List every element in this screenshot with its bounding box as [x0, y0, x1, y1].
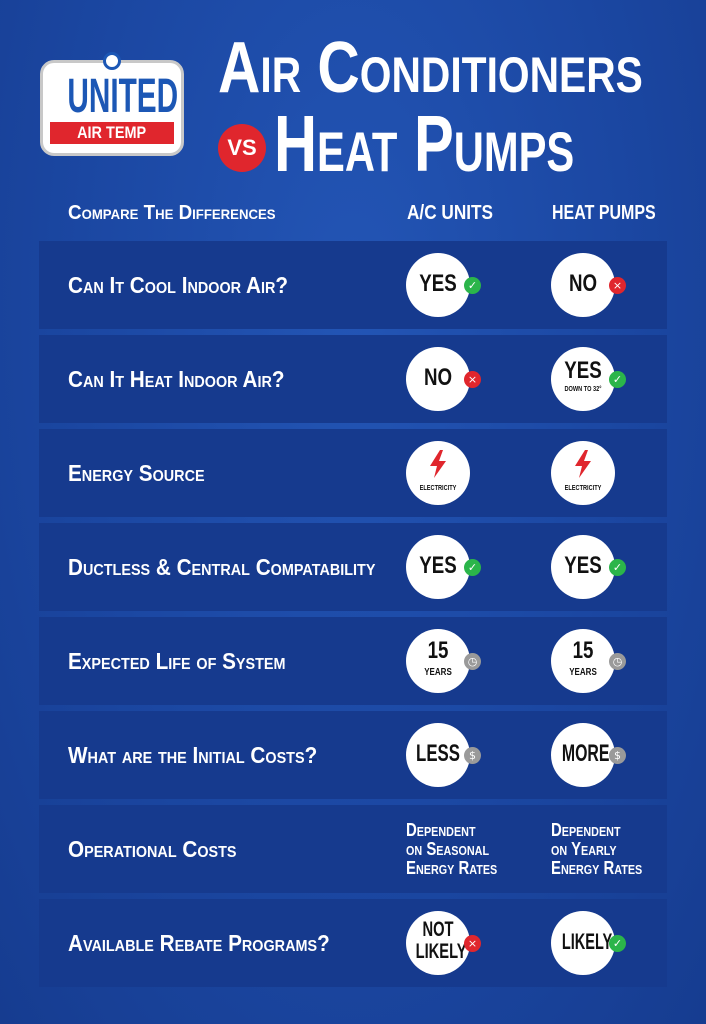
row: operational: on Seasonal	[406, 839, 489, 859]
icon: logo mark	[103, 52, 121, 70]
row: heat: YES	[564, 357, 602, 384]
row: cool: YES	[419, 270, 457, 297]
row: operational: Dependent	[551, 820, 621, 840]
text: HEAT PUMPS	[552, 202, 656, 224]
vs badge: VS	[227, 135, 257, 160]
row: life: ◷	[468, 655, 477, 668]
column headers: Compare The Differences	[68, 202, 276, 224]
text: A/C UNITS	[407, 202, 493, 224]
title: Air Conditioners	[218, 28, 643, 108]
row: operational: Energy Rates	[551, 858, 642, 878]
row: initial	[39, 711, 667, 799]
row: rebate: ×	[468, 937, 477, 950]
row: life: 15	[573, 637, 593, 664]
logo	[40, 52, 184, 156]
row: life	[39, 617, 667, 705]
row: life: 15	[428, 637, 448, 664]
row: rebate: LIKELY	[416, 940, 467, 963]
row: operational: on Yearly	[551, 839, 617, 859]
row: heat: DOWN TO 32°	[564, 386, 601, 393]
row: energy: ELECTRICITY	[565, 485, 601, 492]
row: cool: NO	[569, 270, 597, 297]
row: energy: ELECTRICITY	[420, 485, 456, 492]
row: energy: Energy Source	[68, 460, 205, 486]
row: heat: ×	[468, 373, 477, 386]
row: heat: ✓	[613, 373, 622, 386]
vs badge	[218, 124, 266, 172]
row: operational: Energy Rates	[406, 858, 497, 878]
row: heat	[39, 335, 667, 423]
row: operational: Operational Costs	[68, 836, 237, 862]
row: operational: Dependent	[406, 820, 476, 840]
row: operational	[39, 805, 667, 893]
row: initial: What are the Initial Costs?	[68, 742, 317, 768]
row: ductless: Ductless & Central Compatability	[68, 554, 375, 580]
logo: UNITED	[67, 70, 178, 123]
row: ductless	[39, 523, 667, 611]
row: rebate: ✓	[613, 937, 622, 950]
row: life: YEARS	[424, 667, 452, 678]
row: cool: ✓	[468, 279, 477, 292]
row: heat: NO	[424, 364, 452, 391]
row: ductless: YES	[419, 552, 457, 579]
logo: AIR TEMP	[77, 123, 147, 142]
row: life: YEARS	[569, 667, 597, 678]
row: heat: Can It Heat Indoor Air?	[68, 366, 285, 392]
row: ductless: ✓	[468, 561, 477, 574]
row: rebate: Available Rebate Programs?	[68, 930, 330, 956]
row: rebate: LIKELY	[562, 929, 612, 954]
row: ductless: ✓	[613, 561, 622, 574]
row: initial: $	[614, 749, 621, 762]
row: cool: Can It Cool Indoor Air?	[68, 272, 288, 298]
row: life: ◷	[613, 655, 622, 668]
row: life: Expected Life of System	[68, 648, 286, 674]
row: initial: $	[469, 749, 476, 762]
row: initial: LESS	[416, 740, 460, 767]
row: energy	[39, 429, 667, 517]
row: initial: MORE	[562, 740, 609, 767]
subtitle: Heat Pumps	[274, 99, 574, 188]
row: cool	[39, 241, 667, 329]
row: cool: ×	[613, 279, 622, 292]
row: rebate	[39, 899, 667, 987]
row: ductless: YES	[564, 552, 602, 579]
row: rebate: NOT	[422, 918, 454, 941]
